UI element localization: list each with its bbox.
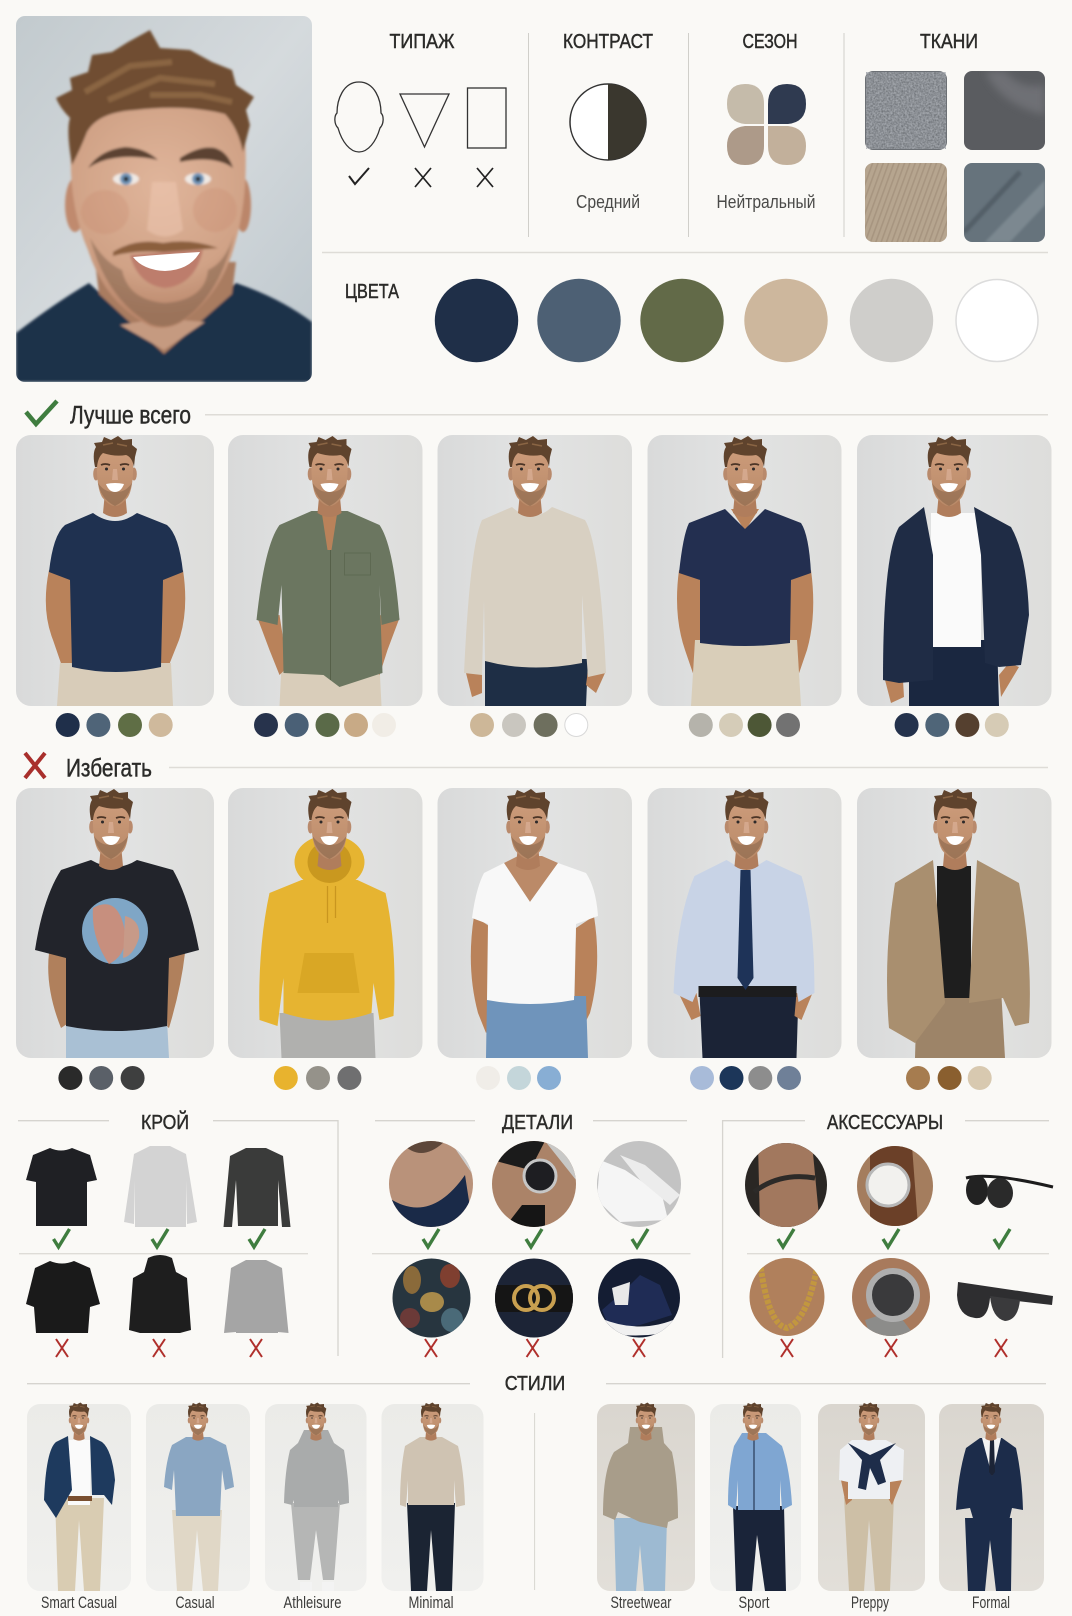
icon: check — [349, 168, 369, 184]
icon: check — [994, 1229, 1010, 1247]
icon: cross — [153, 1339, 165, 1357]
icon: red cross — [25, 753, 45, 778]
swatches: avoid 5 — [906, 1066, 992, 1090]
label: Smart Casual — [41, 1593, 117, 1612]
garment: oversized t-shirt — [26, 1261, 100, 1333]
swatches: avoid 1 — [58, 1066, 145, 1090]
label: Minimal — [408, 1593, 454, 1612]
card: navy overshirt — [857, 435, 1052, 706]
photo: white sneakers — [597, 1141, 681, 1227]
garment: grey blazer — [224, 1260, 288, 1333]
style card: minimal — [382, 1403, 484, 1612]
panel: fabrics — [865, 31, 1045, 242]
swatch: white — [956, 280, 1038, 362]
panel: colour palette — [345, 279, 1038, 362]
photo: paisley pattern — [392, 1258, 472, 1338]
label: Formal — [972, 1593, 1010, 1612]
icon: cross — [995, 1339, 1007, 1357]
icon: half circle — [570, 84, 646, 160]
icon: rectangle face — [468, 88, 506, 148]
section: styles — [27, 1373, 1046, 1612]
icon: check — [152, 1229, 168, 1247]
heading: best of all: Лучше всего — [70, 402, 191, 430]
portrait photo — [16, 16, 312, 382]
icon: cross — [56, 1339, 68, 1357]
fabric: grey wool — [964, 71, 1045, 150]
photo: slim sunglasses — [966, 1175, 1053, 1208]
swatches: avoid 4 — [690, 1066, 801, 1090]
style card: streetwear — [597, 1403, 695, 1612]
fabric: beige twill — [865, 163, 947, 242]
heading: cut: КРОЙ — [141, 1110, 189, 1134]
style card: athleisure — [265, 1403, 366, 1612]
card: shirt and tie — [648, 788, 842, 1058]
style card: formal — [939, 1403, 1044, 1612]
icon: four petals — [727, 84, 806, 165]
swatches: look 3 — [470, 713, 588, 737]
fabric: slate drape — [964, 163, 1045, 242]
swatches: look 1 — [56, 713, 173, 737]
swatch: navy — [435, 279, 518, 362]
swatches: look 2 — [254, 713, 396, 737]
swatches: look 5 — [895, 713, 1009, 737]
icon: cross — [425, 1339, 437, 1357]
swatch: slate blue — [537, 279, 621, 362]
card: navy polo — [648, 435, 842, 706]
swatches: look 4 — [689, 713, 800, 737]
card: cream sweater — [438, 435, 632, 706]
label: Sport — [738, 1593, 770, 1612]
photo: white-dial watch — [857, 1146, 933, 1226]
icon: cross — [250, 1339, 262, 1357]
icon: cross — [885, 1339, 897, 1357]
card: graphic tee — [16, 788, 214, 1058]
garment: dark blazer — [224, 1148, 290, 1227]
swatch: beige — [744, 279, 828, 362]
card: navy t-shirt — [16, 435, 214, 706]
icon: oval face — [335, 82, 383, 152]
card: white v-neck — [438, 788, 632, 1058]
heading: season: СЕЗОН — [742, 31, 798, 53]
icon: check — [423, 1229, 439, 1247]
icon: check — [632, 1229, 648, 1247]
heading: fabrics: ТКАНИ — [920, 31, 978, 53]
swatches: avoid 2 — [274, 1066, 361, 1090]
style card: sport — [710, 1403, 801, 1612]
panel: season — [716, 31, 816, 212]
section header: avoid — [25, 753, 1048, 782]
icon: green check — [26, 401, 57, 424]
photo: diamond watch — [852, 1258, 930, 1336]
heading: styles: СТИЛИ — [505, 1373, 565, 1395]
photo: gold chain — [749, 1258, 825, 1336]
panel: details — [372, 1112, 690, 1357]
heading: contrast: КОНТРАСТ — [563, 31, 653, 53]
swatch: light grey — [850, 279, 933, 362]
heading: colours: ЦВЕТА — [345, 281, 400, 303]
swatch: olive — [640, 279, 724, 362]
style card: preppy — [818, 1403, 925, 1612]
photo: gold buckle belt — [495, 1258, 573, 1338]
icon: cross — [415, 168, 431, 187]
card: yellow hoodie — [228, 788, 422, 1058]
photo: crew neckline — [389, 1141, 473, 1227]
style card: smart casual — [27, 1403, 131, 1612]
label: Casual — [176, 1593, 214, 1612]
icon: cross — [527, 1339, 539, 1357]
swatches: avoid 3 — [476, 1066, 561, 1090]
icon: check — [249, 1229, 265, 1247]
section header: best — [26, 401, 1048, 430]
label: Athleisure — [284, 1593, 342, 1612]
icon: check — [778, 1229, 794, 1247]
garment: fitted t-shirt — [26, 1148, 97, 1226]
photo: chunky sneaker — [597, 1258, 681, 1338]
photo: bracelet — [745, 1143, 827, 1227]
icon: check — [526, 1229, 542, 1247]
icon: triangle face — [400, 94, 449, 147]
label: Streetwear — [610, 1593, 672, 1612]
heading: typage: ТИПАЖ — [390, 31, 455, 53]
label: Preppy — [851, 1593, 889, 1612]
panel: accessories — [723, 1112, 1053, 1358]
heading: accessories: АКСЕССУАРЫ — [827, 1112, 943, 1134]
style card: casual — [146, 1403, 250, 1612]
icon: check — [54, 1229, 70, 1247]
icon: cross — [781, 1339, 793, 1357]
card: olive shirt — [228, 435, 422, 706]
fabric: tweed — [865, 71, 947, 150]
label: medium: Средний — [576, 192, 640, 212]
card: tan blazer — [857, 788, 1052, 1058]
garment: light shirt — [124, 1146, 197, 1227]
photo: wristwatch — [492, 1141, 576, 1227]
icon: check — [883, 1229, 899, 1247]
garment: black hoodie — [129, 1255, 191, 1333]
photo: bold sunglasses — [957, 1282, 1053, 1321]
heading: avoid: Избегать — [66, 754, 152, 782]
heading: details: ДЕТАЛИ — [502, 1112, 573, 1134]
icon: cross — [477, 168, 493, 187]
panel: contrast — [563, 31, 653, 212]
label: neutral: Нейтральный — [716, 192, 816, 212]
icon: cross — [633, 1339, 645, 1357]
panel: face type — [335, 31, 506, 187]
panel: cut — [18, 1110, 338, 1357]
